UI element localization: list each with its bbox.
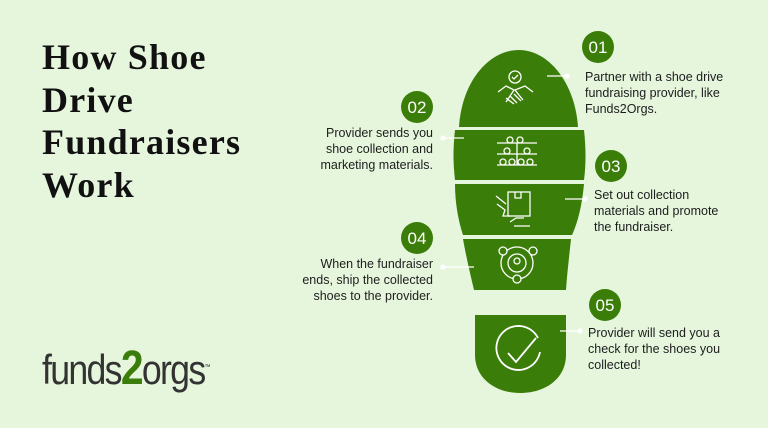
logo: funds2orgs: funds2orgs™	[42, 342, 209, 395]
step 1 text: Partner with a shoe drive	[585, 70, 723, 84]
sole segment 1	[459, 50, 578, 127]
step 2 text: marketing materials.	[320, 158, 433, 172]
number badges: 02	[408, 98, 426, 117]
heel	[475, 315, 566, 393]
icon: box hand-off	[496, 192, 530, 226]
step 4 text: shoes to the provider.	[313, 289, 433, 303]
step 3 text: materials and promote	[594, 204, 718, 218]
title: Fundraisers	[42, 122, 241, 162]
sole segment 4	[463, 239, 571, 290]
step 2 text: shoe collection and	[326, 142, 433, 156]
step 5 text	[588, 326, 720, 372]
title	[42, 37, 241, 204]
step 1 text: fundraising provider, like	[585, 86, 720, 100]
sole segment 3	[455, 184, 584, 235]
connector lines	[441, 74, 587, 333]
step 5 text: Provider will send you a	[588, 326, 720, 340]
icon: checkmark	[496, 326, 540, 370]
step 3 text: the fundraiser.	[594, 220, 673, 234]
icon: handshake	[498, 71, 533, 104]
step 5 text: check for the shoes you	[588, 342, 720, 356]
step 5 text: collected!	[588, 358, 641, 372]
title: How Shoe	[42, 37, 207, 77]
sole segment 2	[454, 130, 586, 180]
step 1 text	[585, 70, 723, 116]
number badges: 03	[602, 157, 620, 176]
number badges	[401, 31, 627, 321]
step 2 text	[320, 126, 433, 172]
title: Drive	[42, 80, 134, 120]
step 4 text: ends, ship the collected	[302, 273, 433, 287]
number badges: 01	[589, 38, 607, 57]
step 1 text: Funds2Orgs.	[585, 102, 657, 116]
step 2 text: Provider sends you	[326, 126, 433, 140]
title: Work	[42, 164, 135, 204]
icon: network people	[499, 247, 537, 283]
step 3 text	[594, 188, 718, 234]
step 3 text: Set out collection	[594, 188, 689, 202]
step 4 text	[302, 257, 433, 303]
icon: shelves	[497, 137, 537, 165]
number badges: 05	[596, 296, 614, 315]
number badges: 04	[408, 229, 426, 248]
step 4 text: When the fundraiser	[320, 257, 433, 271]
